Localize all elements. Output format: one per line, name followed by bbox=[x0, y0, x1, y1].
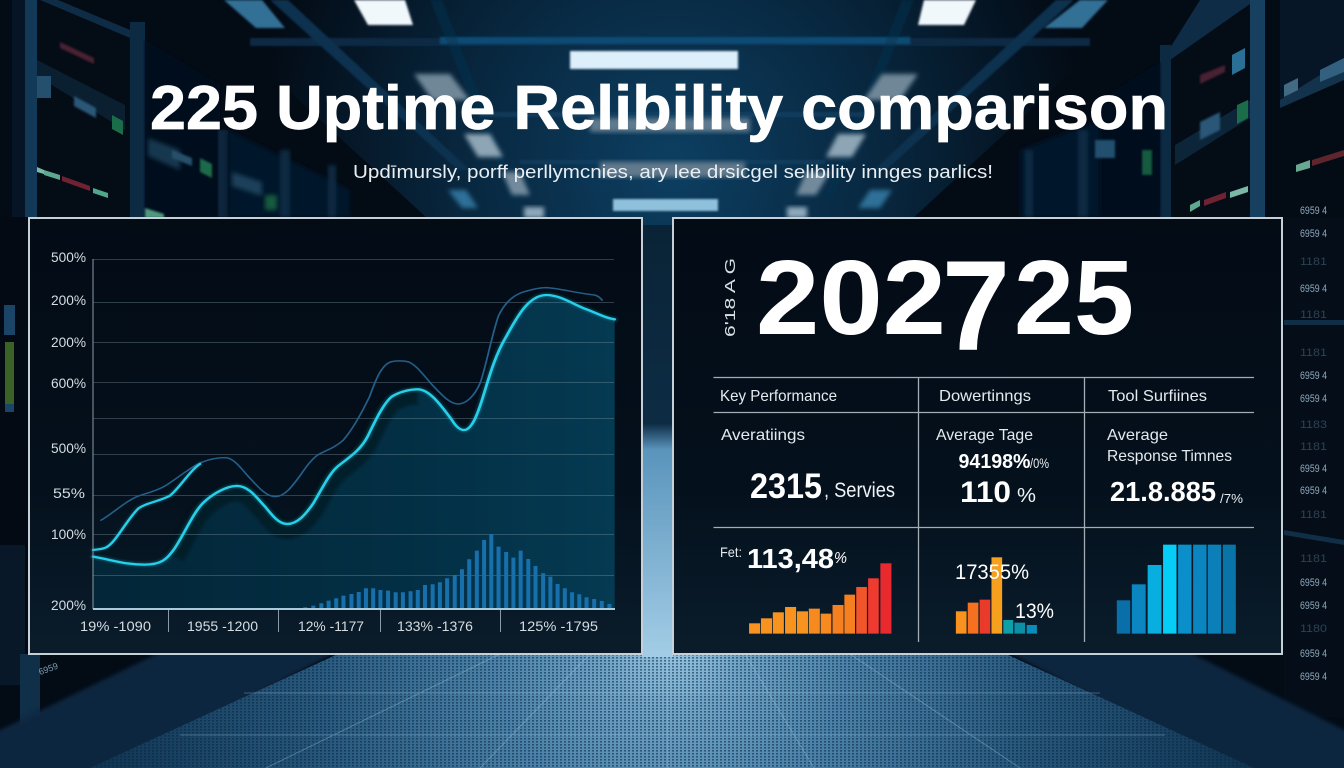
rack labels right dim: 1181 bbox=[1300, 347, 1327, 359]
rack labels right dim: 1183 bbox=[1300, 419, 1327, 431]
bar chart: orange to red bbox=[749, 563, 891, 634]
rack labels right: 6959 4 bbox=[1300, 228, 1327, 240]
left server racks bbox=[0, 0, 350, 750]
column: Average Response Timnes: /7% bbox=[1220, 491, 1243, 506]
y axis labels: 500% bbox=[51, 441, 86, 456]
floor side shading bbox=[0, 650, 340, 768]
rack labels right: 6959 4 bbox=[1300, 600, 1327, 612]
ceiling beams bbox=[250, 0, 1090, 200]
rack label left: 6959 bbox=[37, 661, 59, 677]
bar chart: blue bbox=[1117, 545, 1236, 634]
bar value: 13%: 13% bbox=[1015, 600, 1054, 623]
column: Average Response Timnes: Average bbox=[1107, 427, 1168, 444]
column: Average Tage: 94198% bbox=[958, 451, 1031, 473]
title: 225 Uptime Relibility comparison bbox=[150, 74, 1168, 143]
y axis labels: 200% bbox=[51, 598, 86, 613]
rack labels right: 6959 4 bbox=[1300, 393, 1327, 405]
perforated floor bbox=[90, 654, 1254, 768]
y axis labels: 100% bbox=[51, 527, 86, 542]
rack labels right dim: 1181 bbox=[1300, 309, 1327, 321]
rack labels right dim: 1181 bbox=[1300, 441, 1327, 453]
x axis labels: 19% -1090 bbox=[80, 618, 151, 634]
column: Average Response Timnes: Response Timnes bbox=[1107, 448, 1232, 465]
axes bbox=[93, 259, 500, 632]
y axis labels: 200% bbox=[51, 293, 86, 308]
right server racks bbox=[1020, 0, 1344, 717]
y axis labels: 600% bbox=[51, 376, 86, 391]
y axis labels: 55% bbox=[53, 486, 85, 501]
rack labels right dim bbox=[1300, 256, 1327, 635]
rack labels right dim: 1181 bbox=[1300, 553, 1327, 565]
floor side shading right bbox=[1004, 650, 1344, 768]
bar value: 113,48%: Fet: bbox=[720, 544, 742, 560]
big year number: 202 bbox=[756, 239, 946, 357]
table headers: Key Performance bbox=[720, 388, 837, 405]
rack labels right: 6959 4 bbox=[1300, 370, 1327, 382]
grid lines bbox=[93, 260, 614, 576]
panel: key metrics bbox=[673, 218, 1282, 654]
rack labels right: 6959 4 bbox=[1300, 463, 1327, 475]
rack labels right: 6959 4 bbox=[1300, 283, 1327, 295]
rotated label: 6'18 A G bbox=[722, 258, 739, 337]
rack labels right dim: 1181 bbox=[1300, 256, 1327, 268]
subtitle: Updīmursly, porff perllymcnies, ary lee drsicgel selibility innges parlics! bbox=[353, 162, 993, 182]
rack labels right: 6959 4 bbox=[1300, 485, 1327, 497]
bar value: 113,48%: % bbox=[834, 550, 847, 567]
bar value: 113,48% bbox=[720, 543, 847, 574]
ceiling lights bbox=[224, 0, 1108, 218]
table headers: Tool Surfiines bbox=[1108, 388, 1207, 405]
rack labels right bbox=[1300, 205, 1327, 683]
rack labels right: 6959 4 bbox=[1300, 648, 1327, 660]
bright upper line bbox=[93, 464, 200, 550]
bar chart: orange and teal bbox=[956, 557, 1037, 634]
y axis labels: 200% bbox=[51, 335, 86, 350]
dark shade beneath line bbox=[175, 396, 418, 557]
table headers: Dowertinngs bbox=[939, 388, 1031, 405]
column: Averatiings: , Servies bbox=[824, 479, 895, 502]
column: Averatiings: 2315 bbox=[750, 467, 822, 506]
bars bbox=[297, 534, 609, 609]
big year number: 25 bbox=[1014, 239, 1134, 357]
bar value: 113,48%: 113,48 bbox=[747, 543, 834, 574]
y axis labels: 500% bbox=[51, 250, 86, 265]
column: Average Tage: % bbox=[1017, 485, 1036, 507]
baseline bbox=[93, 608, 615, 610]
x axis labels: 12% -1177 bbox=[298, 618, 364, 634]
column: Averatiings bbox=[721, 427, 895, 506]
bright main line bbox=[93, 295, 615, 565]
center aisle glow between panels bbox=[642, 225, 673, 657]
column: Average Tage: Average Tage bbox=[936, 427, 1033, 444]
area under line bbox=[93, 295, 615, 609]
panel: uptime line chart bbox=[29, 218, 642, 654]
column: Average Tage bbox=[936, 427, 1049, 509]
column: Average Response Timnes bbox=[1107, 427, 1243, 507]
x axis labels bbox=[80, 618, 598, 634]
rack labels right dim: 1180 bbox=[1300, 623, 1327, 635]
table grid bbox=[714, 377, 1254, 642]
column: Averatiings: Averatiings bbox=[721, 427, 805, 444]
table headers bbox=[720, 388, 1207, 405]
column: Average Tage: /0% bbox=[1030, 455, 1049, 471]
rack labels right: 6959 4 bbox=[1300, 671, 1327, 683]
bar value: 17355%: 17355% bbox=[955, 561, 1029, 584]
ceiling bbox=[190, 0, 1150, 230]
column: Average Tage: 110 bbox=[960, 476, 1011, 509]
big year number bbox=[756, 235, 1134, 378]
big year number: 7 bbox=[942, 235, 1010, 378]
y axis labels bbox=[51, 250, 86, 613]
rack labels right dim: 1181 bbox=[1300, 509, 1327, 521]
rack labels right: 6959 4 bbox=[1300, 205, 1327, 217]
rack labels right: 6959 4 bbox=[1300, 577, 1327, 589]
x axis labels: 1955 -1200 bbox=[187, 618, 258, 634]
secondary dim line bbox=[100, 288, 603, 521]
x axis labels: 133% -1376 bbox=[397, 618, 473, 634]
column: Average Response Timnes: 21.8.885 bbox=[1110, 476, 1216, 507]
x axis labels: 125% -1795 bbox=[519, 618, 598, 634]
